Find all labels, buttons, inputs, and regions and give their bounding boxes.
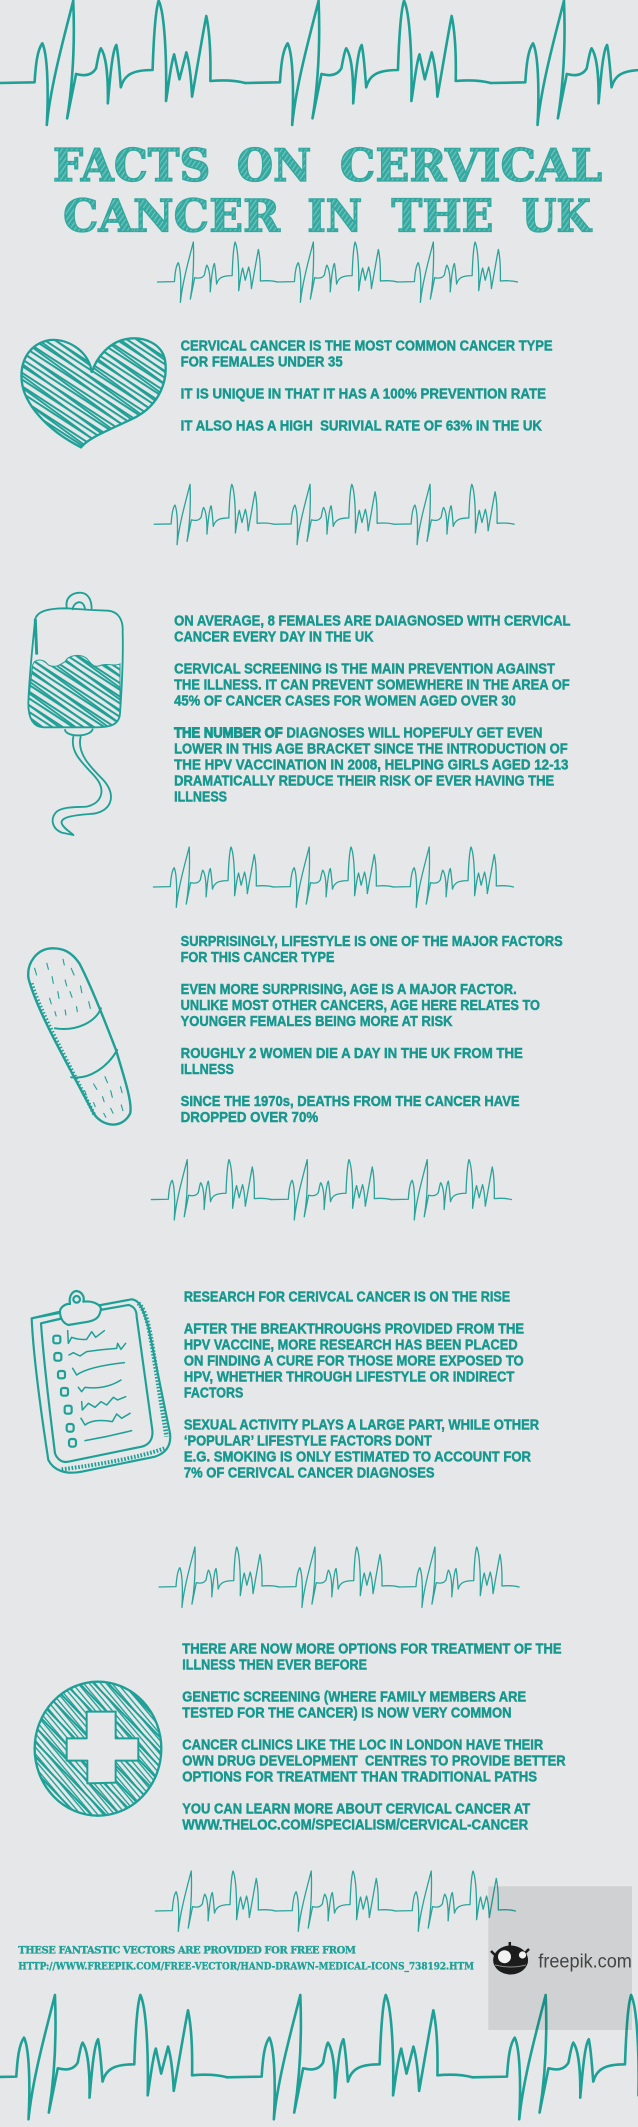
text block: diagnosis and screening: THE NUMBER OF DIAGNOSES WILL HOPEFULY GET EVEN [174,726,542,741]
watermark box [488,1886,632,2030]
panel: statistics with heart [21,338,553,447]
text block: treatment: YOU CAN LEARN MORE ABOUT CERVICAL CANCER AT [182,1802,530,1817]
text block: lifestyle and age: YOUNGER FEMALES BEING MORE AT RISK [181,1014,453,1030]
footer credit text [18,1946,474,1972]
icon: medical cross badge [35,1682,161,1816]
heartbeat divider 6 [155,1871,515,1931]
heartbeat divider 1 [158,242,517,302]
icon: clipboard checklist [32,1291,170,1473]
footer credit text: THESE FANTASTIC VECTORS ARE PROVIDED FOR FREE FROM [18,1946,356,1957]
text block: research: AFTER THE BREAKTHROUGHS PROVIDED FROM THE [184,1322,524,1337]
panel: lifestyle and age with capsule [28,934,563,1126]
text block: heart facts: FOR FEMALES UNDER 35 [181,355,343,370]
text block: research: E.G. SMOKING IS ONLY ESTIMATED TO ACCOUNT FOR [184,1450,531,1465]
title: THE [391,190,493,243]
text block: diagnosis and screening: ILLNESS [174,790,227,805]
heartbeat divider 4 [151,1160,511,1220]
icon: IV drip bag [28,593,123,835]
footer credit text: HTTP://WWW.FREEPIK.COM/FREE-VECTOR/HAND-DRAWN-MEDICAL-ICONS_738192.HTM [18,1961,474,1972]
title: FACTS [53,139,210,192]
top heartbeat line [0,1,638,125]
text block: treatment: GENETIC SCREENING (WHERE FAMILY MEMBERS ARE [182,1690,526,1705]
title: CERVICAL [340,139,602,192]
text block: research [184,1290,540,1481]
title: IN [307,190,362,243]
panel: research with clipboard [32,1290,540,1481]
title [53,139,602,243]
text block: diagnosis and screening: CANCER EVERY DAY IN THE UK [174,630,374,645]
heartbeat divider 3 [153,847,513,907]
text block: treatment: TESTED FOR THE CANCER) IS NOW VERY COMMON [182,1706,511,1721]
text block: lifestyle and age: SINCE THE 1970s, DEATHS FROM THE CANCER HAVE [181,1094,520,1110]
heartbeat divider 2 [154,484,514,545]
text block: lifestyle and age: ROUGHLY 2 WOMEN DIE A DAY IN THE UK FROM THE [181,1046,523,1062]
text block: diagnosis and screening [174,614,571,805]
text block: research: FACTORS [184,1386,244,1401]
heartbeat divider 5 [159,1547,519,1607]
text block: research: ‘POPULAR’ LIFESTYLE FACTORS DONT [184,1434,432,1449]
text block: lifestyle and age: EVEN MORE SURPRISING, AGE IS A MAJOR FACTOR. [181,982,517,998]
title: CANCER [63,190,281,243]
freepik watermark [488,1886,632,2030]
text block: diagnosis and screening: 45% OF CANCER CASES FOR WOMEN AGED OVER 30 [174,694,516,709]
text block: research: RESEARCH FOR CERIVCAL CANCER IS ON THE RISE [184,1290,511,1305]
text block: research: ON FINDING A CURE FOR THOSE MORE EXPOSED TO [184,1354,524,1369]
text block: lifestyle and age: FOR THIS CANCER TYPE [181,950,335,966]
text block: lifestyle and age: ILLNESS [181,1062,234,1078]
text block: treatment: ILLNESS THEN EVER BEFORE [182,1658,367,1673]
panel: treatment with medical cross [35,1642,566,1833]
title: UK [522,190,593,243]
text block: research: HPV VACCINE, MORE RESEARCH HAS BEEN PLACED [184,1338,518,1353]
text block: treatment: WWW.THELOC.COM/SPECIALISM/CERVICAL-CANCER [182,1818,529,1833]
text block: research: HPV, WHETHER THROUGH LIFESTYLE OR INDIRECT [184,1370,515,1385]
bottom heartbeat line [0,1995,638,2119]
text block: treatment [182,1642,566,1833]
panel: diagnosis and screening with IV bag [28,593,571,835]
freepik wordmark: freepik.com [538,1950,632,1972]
text block: research: 7% OF CERIVCAL CANCER DIAGNOSES [184,1466,435,1481]
icon: capsule pill [28,948,131,1125]
icon: scribbled heart [21,338,166,447]
text block: lifestyle and age: DROPPED OVER 70% [181,1110,318,1126]
icon: freepik robot [491,1942,529,1974]
title: ON [237,139,311,192]
text block: lifestyle and age [181,934,563,1126]
text block: heart facts [181,339,553,434]
